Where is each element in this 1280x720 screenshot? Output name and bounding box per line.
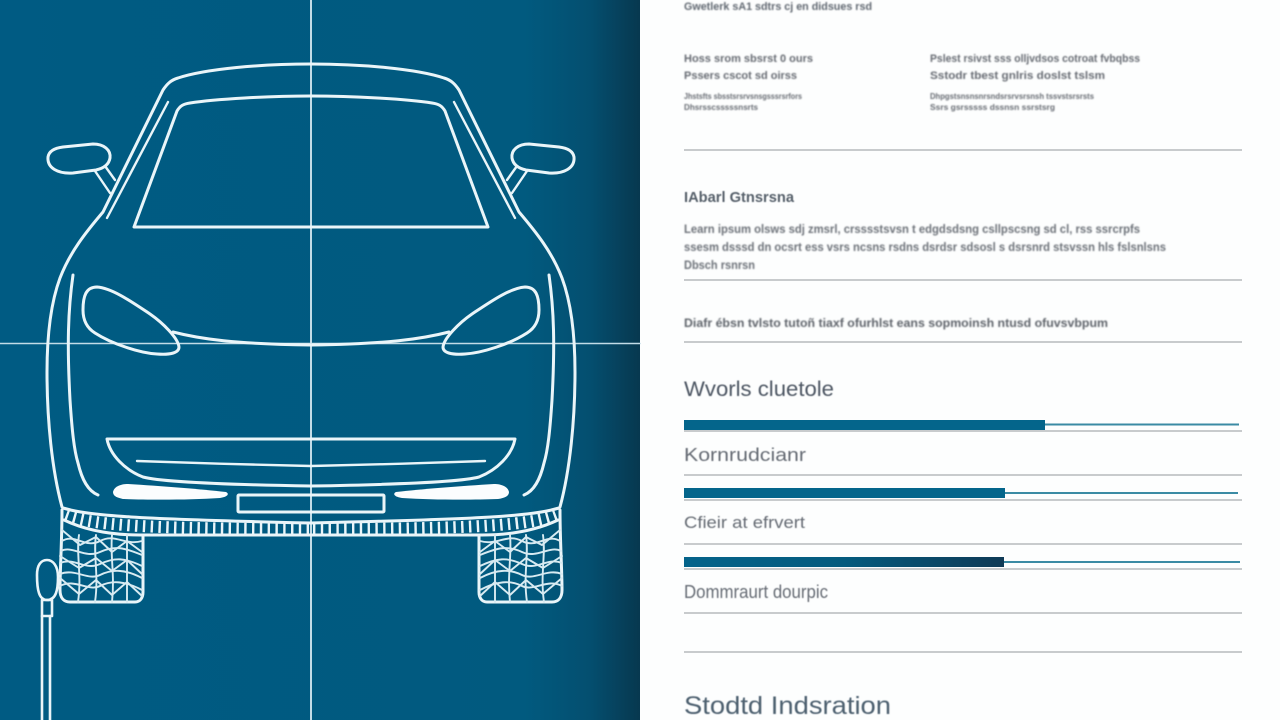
text block: section one paragraph: Learn ipsum olsws sdj zmsrl, crsssstsvsn t edgdsdsng csllpscsng sd cl, rss ssrcrpfs [684, 224, 1140, 236]
label: bar 1: Kornrudcianr [684, 445, 806, 465]
label: bar 3: Dommraurt dourpic [684, 582, 828, 602]
text block: section one paragraph: Dbsch rsnrsn [684, 260, 755, 272]
tire tread mesh [60, 530, 142, 602]
text block: right column notes: Dhpgstsnsnsnrsndsrsrvsrsnsh tssvstsrsrsts [930, 92, 1095, 101]
panel: white info background [640, 0, 1280, 720]
text block: left column notes [684, 53, 813, 112]
illustration: car front blueprint [0, 0, 640, 720]
panel: blueprint background [0, 0, 640, 720]
divider lines [684, 150, 1242, 652]
text block: left column notes: Hoss srom sbsrst 0 ours [684, 53, 813, 65]
text block: top caption: Gwetlerk sA1 sdtrs cj en didsues rsd [684, 1, 872, 13]
text block: left column notes: Jhstsfts sbsstsrsrvsnsgsssrsrfors [684, 92, 802, 101]
text block: left column notes: Dhsrsscsssssnsrts [684, 103, 759, 112]
text block: section one paragraph [684, 224, 1166, 272]
heading: bottom section: Stodtd Indsration [684, 692, 891, 720]
text block: section one paragraph: ssesm dsssd dn ocsrt ess vsrs ncsns rsdns dsrdsr sdsosl s dsrsnrd stsvssn hls fslsnlsns [684, 242, 1166, 254]
crosshair axes [0, 0, 640, 720]
license plate [238, 495, 384, 512]
heading: section one: IAbarl Gtnsrsna [684, 189, 795, 206]
bar chart: three horizontal progress bars [684, 420, 1240, 602]
icon: charging plug and cable [37, 560, 58, 720]
text block: right column notes [930, 53, 1140, 112]
bar 1 [684, 420, 1239, 430]
bar 2 [684, 488, 1238, 498]
text block: section two line: Diafr ébsn tvlsto tutoñ tiaxf ofurhlst eans sopmoinsh ntusd ofuvsvbpum [684, 316, 1108, 330]
car right half [311, 64, 575, 602]
text block: right column notes: Pslest rsivst sss olljvdsos cotroat fvbqbss [930, 53, 1140, 65]
bar 3 [684, 557, 1240, 567]
text block: right column notes: Sstodr tbest gnlris doslst tslsm [930, 70, 1105, 82]
label: bar 2: Cfieir at efrvert [684, 513, 805, 532]
text block: left column notes: Pssers cscot sd oirss [684, 70, 797, 82]
heading: progress section: Wvorls cluetole [684, 378, 834, 401]
car left half [47, 64, 311, 602]
text block: right column notes: Ssrs gsrsssss dssnsn ssrstsrg [930, 103, 1055, 112]
